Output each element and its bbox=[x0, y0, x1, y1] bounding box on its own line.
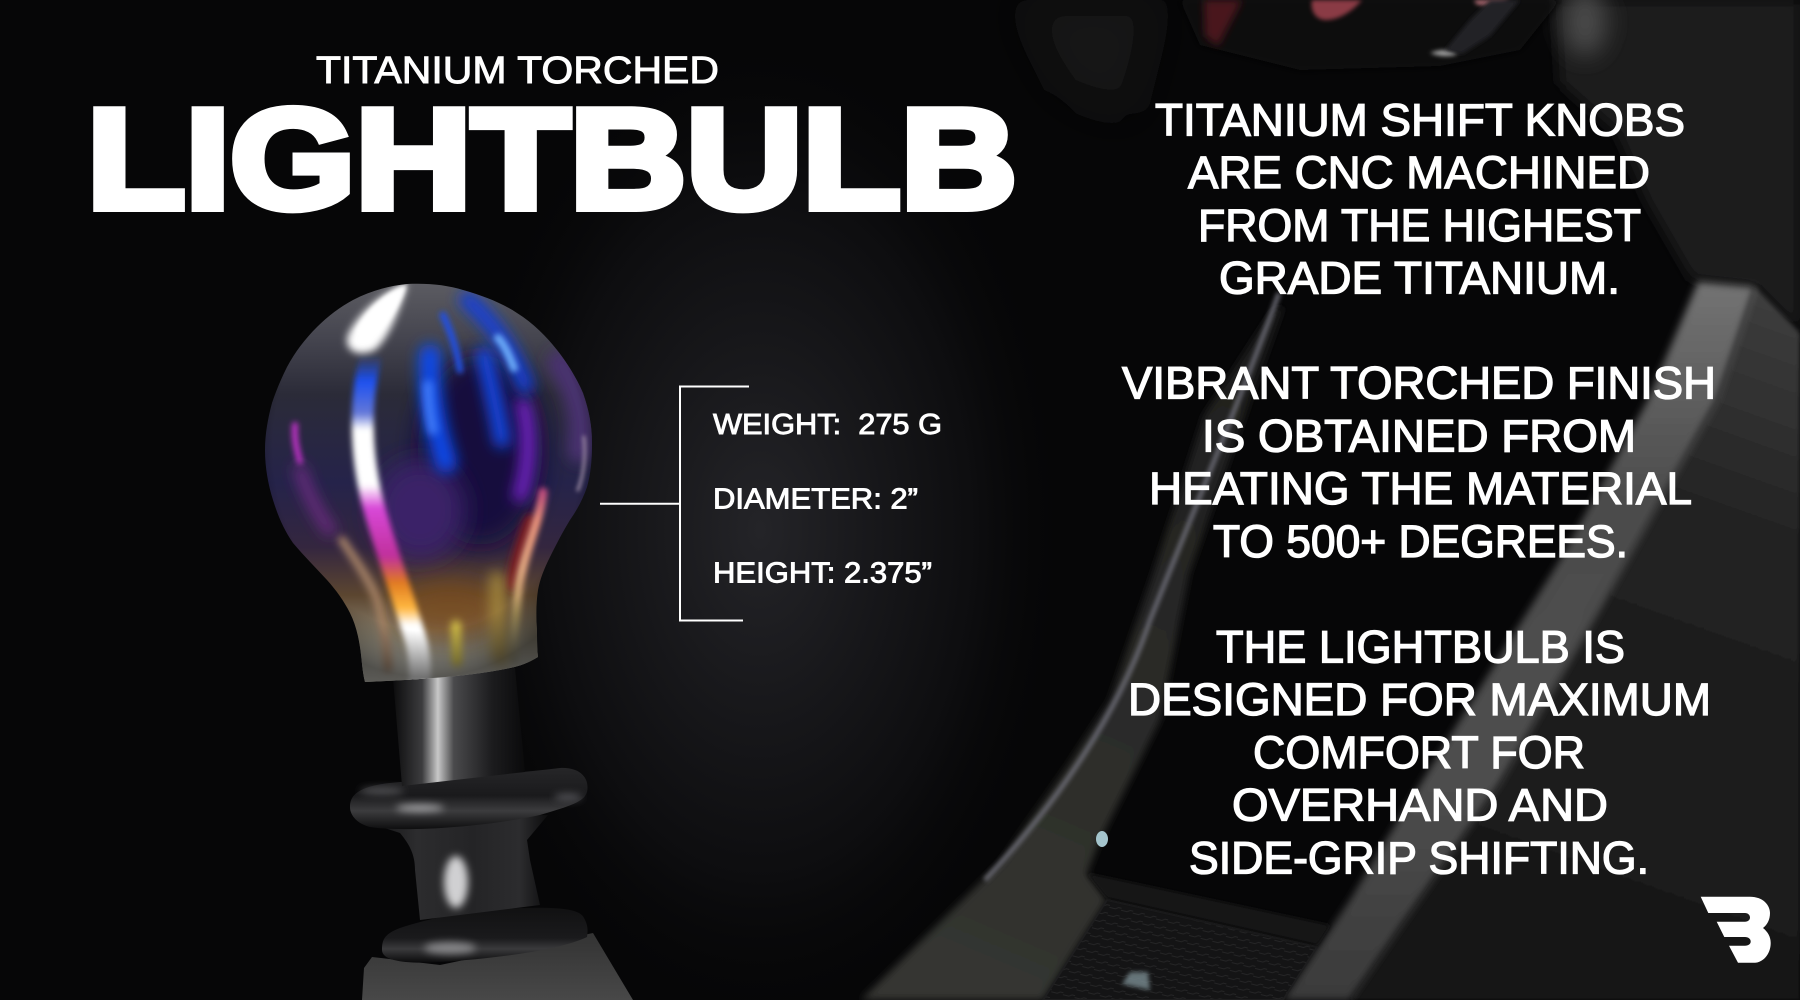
titanium bulb bbox=[255, 275, 600, 685]
main heading: LIGHTBULB bbox=[87, 80, 1017, 239]
paragraph: design: THE LIGHTBULB IS bbox=[1216, 622, 1625, 672]
paragraph: design: COMFORT FOR bbox=[1253, 727, 1585, 778]
top right dark shape bbox=[1555, 0, 1800, 333]
indicator light bbox=[1096, 831, 1108, 847]
purple wash bbox=[375, 460, 465, 560]
left peach bbox=[342, 540, 388, 668]
paragraph: design: SIDE-GRIP SHIFTING. bbox=[1189, 832, 1649, 884]
grey highlight blob bbox=[1563, 0, 1607, 56]
description text bbox=[1122, 94, 1716, 884]
specs list bbox=[713, 409, 942, 590]
paragraph: torched finish: TO 500+ DEGREES. bbox=[1213, 516, 1628, 567]
blue streaks bbox=[430, 355, 446, 462]
panel shelf bbox=[1087, 873, 1330, 945]
grey diagonal trim band bbox=[1283, 282, 1755, 1000]
mesh panel bbox=[1043, 900, 1317, 1000]
edge shading bbox=[351, 386, 592, 682]
ring highlights bbox=[360, 788, 582, 812]
paragraph: torched finish: VIBRANT TORCHED FINISH bbox=[1122, 358, 1716, 408]
trim highlight streak bbox=[985, 293, 1279, 880]
top console with red buttons bbox=[1180, 0, 1560, 70]
small heading: TITANIUM TORCHED bbox=[316, 50, 719, 92]
paragraph: machining: FROM THE HIGHEST bbox=[1198, 200, 1641, 251]
right purple bbox=[560, 363, 582, 450]
paragraph: torched finish: IS OBTAINED FROM bbox=[1202, 410, 1636, 462]
spec: diameter: DIAMETER: 2” bbox=[713, 484, 918, 516]
paragraph: machining: TITANIUM SHIFT KNOBS bbox=[1155, 94, 1685, 146]
flange ring bbox=[350, 768, 588, 829]
paragraph: machining bbox=[1155, 94, 1685, 304]
paragraph: design: OVERHAND AND bbox=[1232, 780, 1608, 830]
bronze base bbox=[395, 580, 505, 640]
spec: weight: WEIGHT: 275 G bbox=[713, 409, 942, 441]
deep navy core bbox=[418, 355, 542, 545]
paragraph: design: DESIGNED FOR MAXIMUM bbox=[1128, 674, 1711, 725]
left magenta bbox=[295, 425, 300, 462]
spec: height: HEIGHT: 2.375” bbox=[713, 558, 932, 590]
neck highlight bbox=[444, 856, 468, 908]
small glyph on mesh bbox=[1122, 972, 1150, 990]
paragraph: torched finish: HEATING THE MATERIAL bbox=[1149, 463, 1692, 514]
background photo: blurred car interior bbox=[861, 0, 1800, 1000]
paragraph: torched finish bbox=[1122, 358, 1716, 567]
lower collar bbox=[382, 908, 588, 963]
product: shift knob bbox=[255, 275, 633, 1000]
curved trim left bbox=[861, 306, 1284, 1000]
flared neck bbox=[360, 815, 548, 920]
metal stem bbox=[393, 668, 525, 786]
dark side panel right bbox=[1350, 287, 1800, 1000]
callout: leader line and bracket bbox=[600, 386, 749, 620]
red and peach right bbox=[512, 520, 530, 585]
paragraph: machining: ARE CNC MACHINED bbox=[1188, 147, 1650, 198]
paragraph: design bbox=[1128, 622, 1711, 884]
brand logo bbox=[1701, 897, 1771, 963]
top white wedge bbox=[347, 284, 407, 353]
gold bands bbox=[497, 578, 500, 658]
leather boot bbox=[362, 933, 633, 1000]
heat colours bbox=[295, 284, 585, 682]
main highlight streak bbox=[363, 360, 420, 682]
collar highlight bbox=[424, 942, 476, 954]
paragraph: machining: GRADE TITANIUM. bbox=[1219, 252, 1620, 304]
